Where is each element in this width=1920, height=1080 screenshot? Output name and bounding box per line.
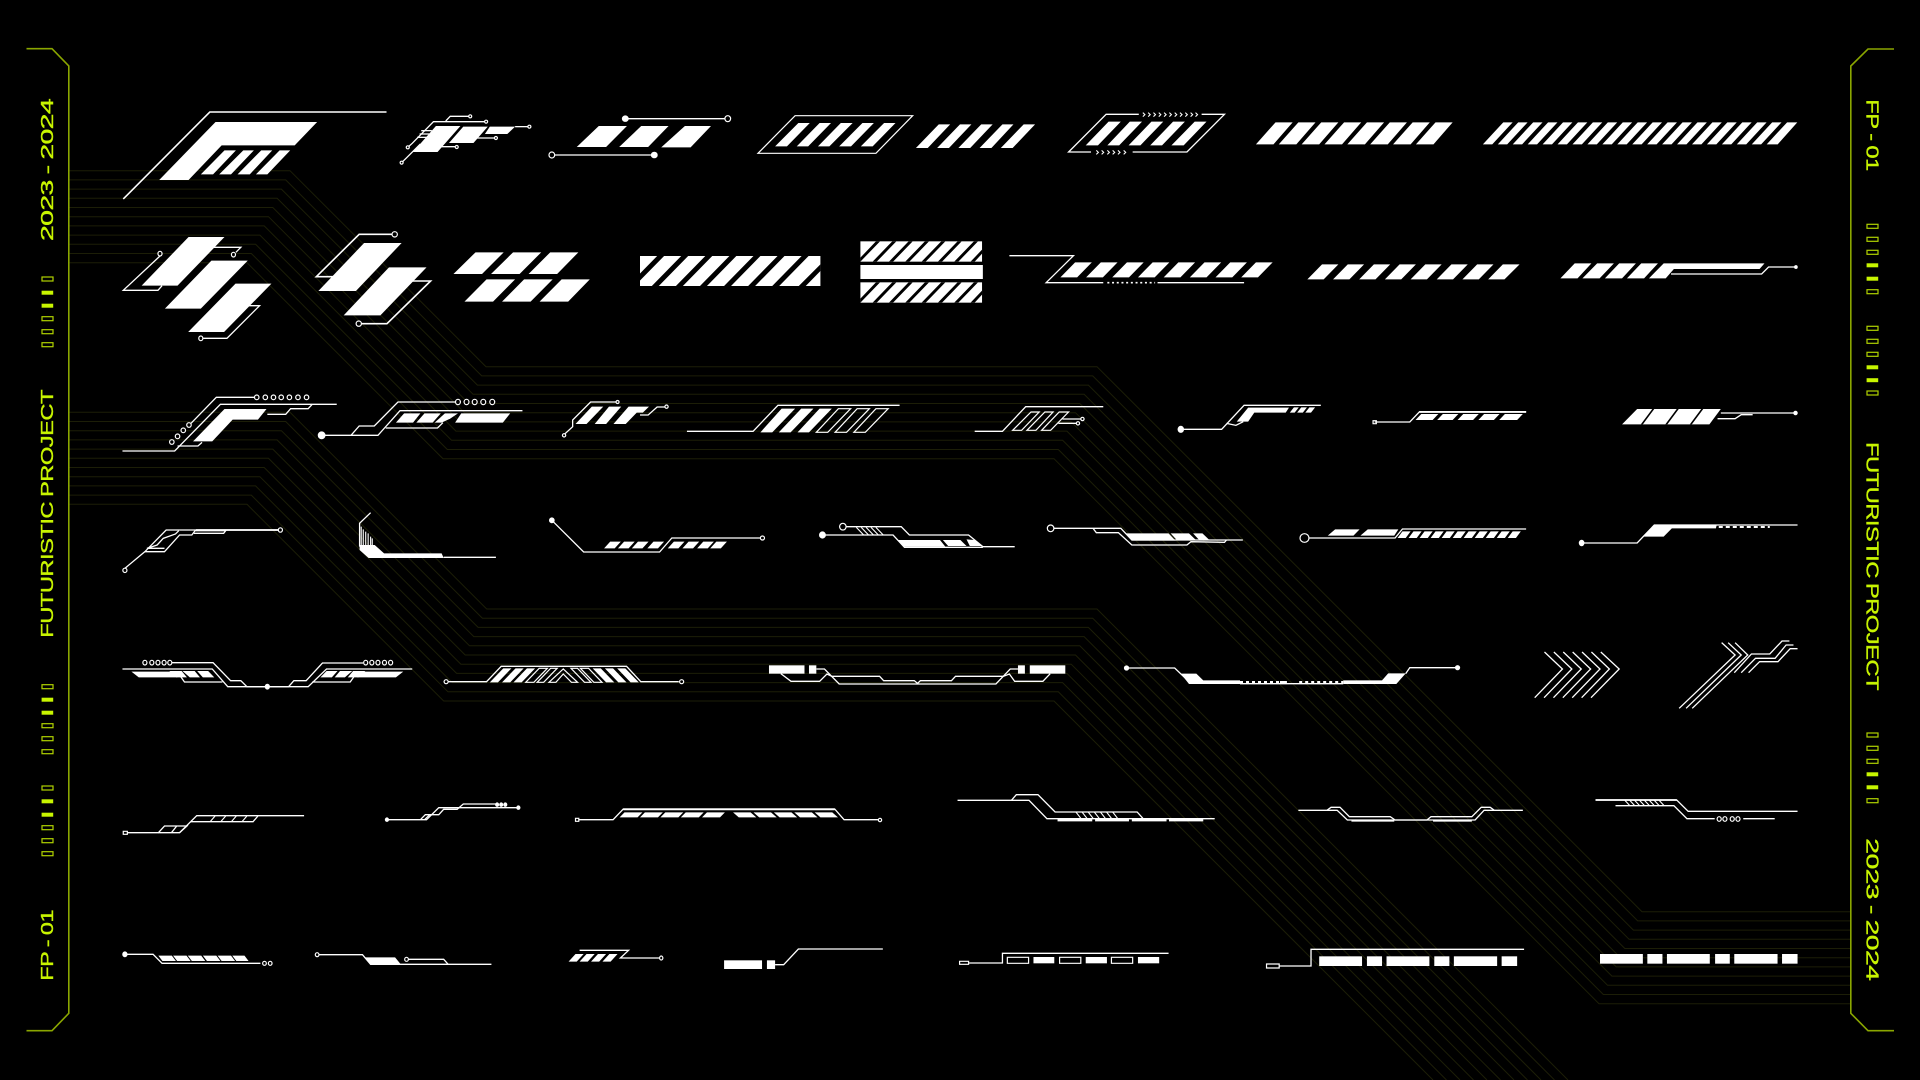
right side frame: [1851, 49, 1894, 1031]
element: stacked parallelograms with lines B: [316, 232, 431, 326]
element: eight medium stripes: [1307, 264, 1520, 279]
element: five stripes: [916, 124, 1035, 148]
right label: years: 2023 - 2024: [1862, 838, 1882, 981]
element: long node bar with slants: [1124, 666, 1460, 684]
element: four stripes with bracket: [569, 950, 663, 962]
element: two rects with rising line: [724, 949, 883, 969]
left side frame: [26, 49, 69, 1031]
element: stepped circuit with hatching: [958, 795, 1215, 821]
element: triple band block: [860, 241, 983, 303]
element: three parallelograms with node lines: [549, 116, 731, 158]
element: open node circuit with three blocks: [1047, 525, 1243, 545]
icon: chevron arrows: [1535, 652, 1619, 698]
right tick group 1: [1867, 224, 1878, 294]
element: six parallelogram grid: [453, 252, 590, 302]
element: mirrored stripes with peak: [444, 666, 684, 684]
left label: years: 2023 - 2024: [37, 98, 57, 241]
element: double node circuit with bar: [820, 523, 1015, 547]
element: node line with five blocks: [1373, 412, 1526, 424]
left tick group 1: [42, 277, 53, 347]
element: stacked parallelograms with lines A: [123, 237, 271, 341]
element: node line with trapezoid: [315, 953, 491, 964]
element: mirrored rect blocks with tray: [769, 665, 1065, 684]
right tick group 2: [1867, 326, 1878, 395]
element: small circuit cluster: [400, 115, 531, 164]
element: fine double circuit with dots: [385, 803, 520, 821]
element: solid rect row: [1600, 954, 1798, 964]
element: node line with bar and small stripes: [1178, 405, 1321, 432]
element: split bar with line tail: [1622, 409, 1797, 424]
icon: branching chevron lines: [1679, 641, 1798, 708]
element: eight wide stripes: [1256, 122, 1453, 144]
element: circuit with open dots row 3 b: [318, 399, 522, 439]
element: wide diagonal stripe block: [628, 256, 820, 286]
element: symmetric circuit with dots row 5 a: [122, 660, 412, 689]
left label: code: FP - 01: [37, 910, 57, 981]
element: symmetric trough circuit: [1298, 807, 1523, 821]
element: outline stripes with nodes: [975, 407, 1103, 431]
background circuit lines: [69, 171, 1850, 1080]
element: big F chevron with stripes: [123, 112, 387, 199]
element: small slanted circuit row 3 c: [562, 400, 668, 437]
element: hatched step circuit with four dots: [1596, 800, 1798, 821]
element: framed stripes with chevrons: [1069, 113, 1224, 154]
left label: futuristic project: FUTURISTIC PROJECT: [37, 389, 57, 638]
element: half solid half outline stripes: [687, 405, 900, 432]
element: outline and filled rect row: [960, 953, 1169, 964]
element: stepped line with solid rect row: [1267, 949, 1524, 968]
right label: code: FP - 01: [1862, 99, 1882, 171]
left tick group 3: [42, 786, 53, 856]
element: symmetrical flat stripe bar: [576, 809, 882, 822]
element: node line with six blocks: [123, 952, 272, 965]
element: stripes merging into long bar: [1560, 263, 1797, 278]
element: framed stripes: [758, 116, 913, 153]
element: square node hashed outline: [123, 816, 304, 834]
element: open node bar with thin stripes: [1300, 529, 1526, 542]
left tick group 2: [42, 685, 53, 754]
element: node line with slanted block and dashes: [1579, 525, 1798, 546]
right label: futuristic project: FUTURISTIC PROJECT: [1862, 442, 1882, 691]
right tick group 3: [1867, 733, 1878, 803]
element: long thin stripe bar: [1483, 122, 1797, 144]
element: hatched corner bar: [360, 513, 496, 558]
element: node line with small blocks: [550, 518, 764, 552]
element: circuit with open dots row 3 a: [122, 395, 337, 451]
element: stripes with bracket line and dots: [1009, 256, 1273, 283]
element: circuit outline row 4 a: [123, 528, 282, 572]
